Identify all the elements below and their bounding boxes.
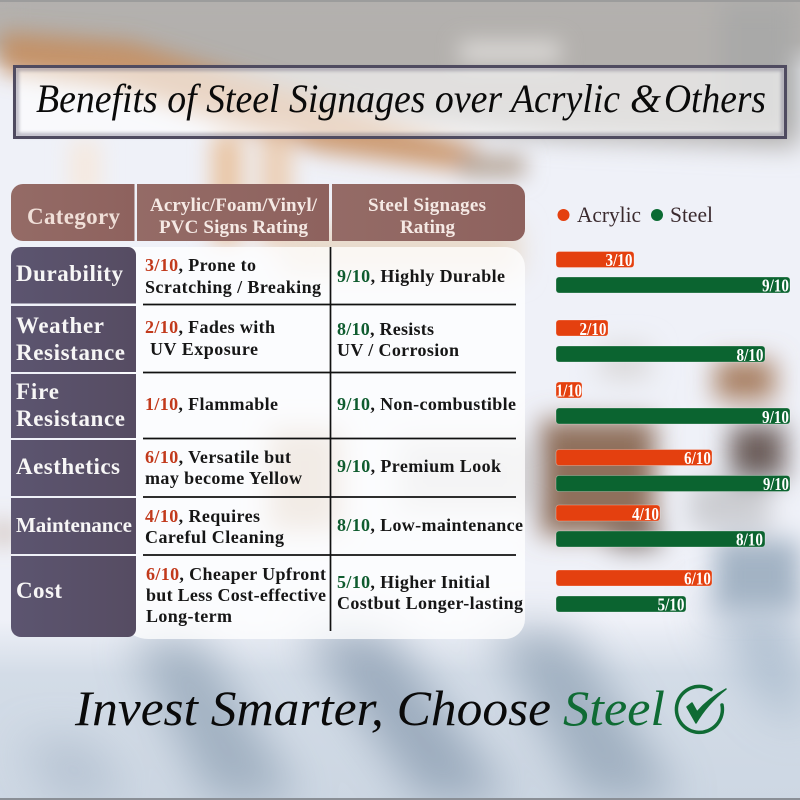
steel weather [337, 319, 459, 360]
category: fire resistance: Resistance [16, 406, 125, 431]
header: steel rating: Rating [400, 217, 456, 238]
steel weather: UV / Corrosion [337, 340, 459, 360]
acrylic durability: 3/10, Prone to [145, 255, 256, 275]
bars: weather resistance: 8/10 [736, 345, 764, 365]
category: cost [11, 556, 136, 637]
acrylic aesthetics [145, 447, 302, 488]
bar chart [556, 250, 790, 614]
header: acrylic rating [137, 184, 329, 241]
legend: Steel [670, 202, 713, 227]
legend [558, 202, 713, 227]
acrylic durability: Scratching / Breaking [145, 277, 321, 297]
steel rating column [337, 266, 523, 613]
header: steel rating: Steel Signages [368, 195, 486, 216]
acrylic cost [146, 564, 326, 626]
category: weather resistance [11, 306, 136, 372]
steel cost [337, 572, 523, 613]
category: durability: Durability [16, 261, 124, 286]
steel aesthetics: 9/10, Premium Look [337, 456, 501, 476]
bars: aesthetics: 9/10 [763, 474, 789, 494]
title: Benefits of Steel Signages over Acrylic [36, 76, 620, 121]
tagline: Invest Smarter, Choose [74, 680, 551, 736]
steel maintenance: 8/10, Low-maintenance [337, 515, 523, 535]
bars: aesthetics [556, 448, 790, 494]
acrylic weather [145, 317, 275, 359]
acrylic maintenance [145, 506, 284, 547]
acrylic cost: but Less Cost-effective [146, 585, 326, 605]
header: category: Category [27, 204, 120, 229]
category column [11, 247, 136, 637]
header: steel rating [332, 184, 525, 241]
bars: durability: 9/10 [762, 276, 789, 296]
acrylic aesthetics: 6/10, Versatile but [145, 447, 291, 467]
category: aesthetics: Aesthetics [16, 454, 120, 479]
steel fire: 9/10, Non-combustible [337, 394, 516, 414]
category: weather resistance: Weather [16, 313, 104, 338]
acrylic cost: Long-term [146, 606, 232, 626]
header: acrylic rating: Acrylic/Foam/Vinyl/ [150, 195, 318, 216]
acrylic weather: 2/10, Fades with [145, 317, 275, 337]
header: acrylic rating: PVC Signs Rating [159, 217, 308, 238]
legend: Acrylic [577, 202, 641, 227]
tagline: Steel [563, 680, 665, 736]
bars: durability [556, 250, 790, 296]
bars: weather resistance: 2/10 [580, 319, 606, 339]
bars: fire resistance: 9/10 [762, 407, 789, 427]
bars: durability: 3/10 [606, 250, 632, 270]
table header [11, 184, 525, 241]
category: cost: Cost [16, 578, 62, 603]
header: category [11, 184, 134, 241]
bars: cost: 6/10 [684, 568, 711, 588]
acrylic durability [145, 255, 321, 297]
title: Others [664, 76, 766, 121]
steel cost: 5/10, Higher Initial [337, 572, 490, 592]
acrylic maintenance: Careful Cleaning [145, 527, 284, 547]
category: fire resistance [11, 374, 136, 438]
category: durability [11, 247, 136, 304]
steel weather: 8/10, Resists [337, 319, 434, 339]
category: aesthetics [11, 440, 136, 496]
title: & [630, 76, 661, 121]
acrylic rating column [145, 255, 326, 626]
bars: fire resistance [556, 380, 790, 427]
category: weather resistance: Resistance [16, 340, 125, 365]
acrylic fire: 1/10, Flammable [145, 394, 278, 414]
category: fire resistance: Fire [16, 379, 59, 404]
bars: maintenance: 4/10 [632, 504, 659, 524]
bars: aesthetics: 6/10 [684, 448, 711, 468]
bars: maintenance: 8/10 [736, 530, 763, 550]
steel cost: Costbut Longer-lasting [337, 593, 523, 613]
acrylic aesthetics: may become Yellow [145, 468, 302, 488]
acrylic weather: UV Exposure [150, 339, 258, 359]
category: maintenance [11, 498, 136, 554]
bars: cost [556, 568, 712, 614]
steel durability: 9/10, Highly Durable [337, 266, 505, 286]
bars: maintenance [556, 504, 765, 550]
table body panel [120, 247, 525, 639]
title box [14, 66, 786, 138]
category: maintenance: Maintenance [16, 513, 132, 537]
bars: weather resistance [556, 319, 765, 365]
acrylic maintenance: 4/10, Requires [145, 506, 260, 526]
acrylic cost: 6/10, Cheaper Upfront [146, 564, 326, 584]
bars: fire resistance: 1/10 [556, 380, 582, 400]
bars: cost: 5/10 [658, 594, 684, 614]
icon: green check circle [676, 686, 726, 732]
